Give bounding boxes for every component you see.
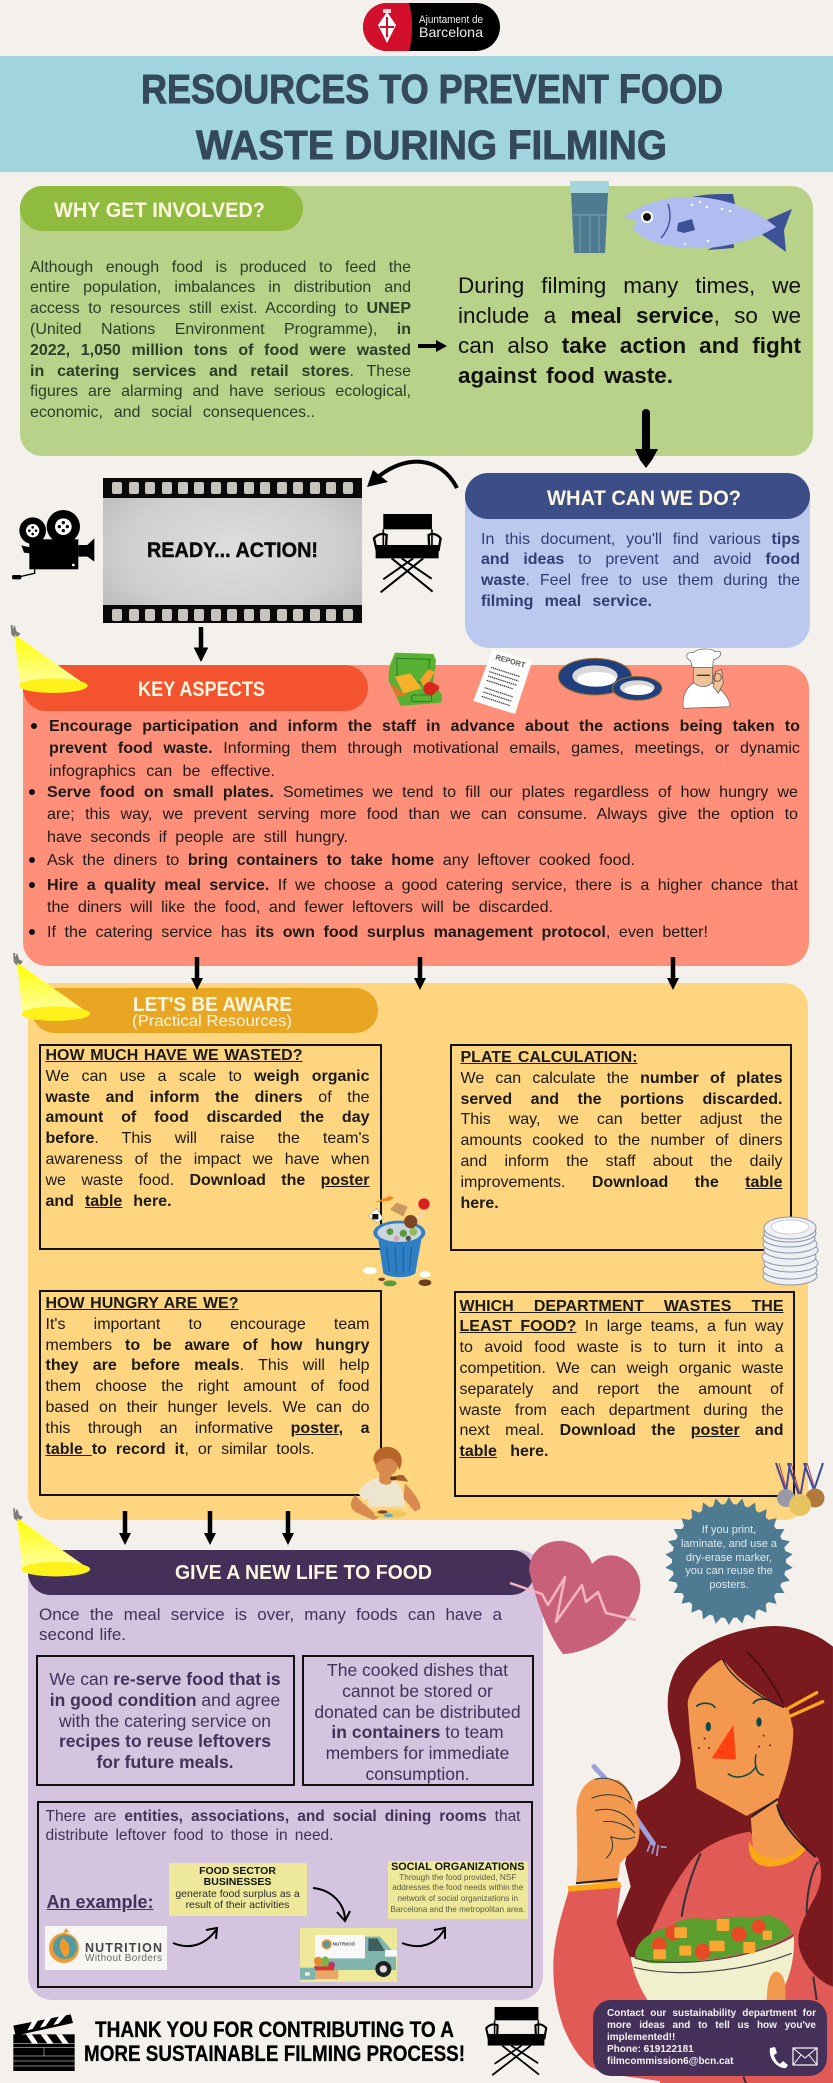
text: what can we do — [481, 531, 800, 610]
box: food sector businesses: generate food surplus as a — [175, 1888, 300, 1900]
logo: Ajuntament de Barcelona — [363, 3, 500, 51]
box: re-serve food: for future meals. — [96, 1752, 234, 1772]
panel: let's be aware — [28, 983, 808, 1520]
text: second life intro — [39, 1605, 502, 1644]
box: social organizations — [388, 1860, 528, 1918]
text: thank you: THANK YOU FOR CONTRIBUTING TO A — [95, 2017, 454, 2042]
box: how much have we wasted: and table here. — [46, 1193, 172, 1210]
film strip: ready action: READY... ACTION! — [147, 539, 318, 562]
text: contact details — [607, 2008, 816, 2067]
box: food sector businesses — [168, 1862, 306, 1916]
text: meal service call to action: against food waste. — [458, 363, 673, 388]
text: meal service call to action: can also take action and fight — [458, 333, 801, 358]
box: how much have we wasted: waste and inform the diners of the — [46, 1089, 370, 1106]
heading: let's be aware: LET'S BE AWARE — [133, 994, 292, 1016]
box: social organizations: network of social organizations in — [397, 1894, 518, 1903]
box: plate calculation: improvements. Download the table — [460, 1174, 782, 1191]
box: which department wastes the least food: competition. We can weigh organic waste — [460, 1360, 784, 1377]
text: food waste context: access to resources still exist. According to UNEP — [30, 300, 411, 317]
icon: clapperboard — [13, 2014, 75, 2071]
text: contact details: Phone: 619122181 — [607, 2044, 694, 2055]
illustration: nutrition delivery truck — [300, 1928, 396, 1982]
text: contact details: Contact our sustainability department for — [607, 2008, 816, 2019]
bullet: quality meal service: Hire a quality meal service. If we choose a good catering service, there is a higher chance that — [47, 876, 798, 894]
box: social organizations: addresses the food needs within the — [392, 1883, 523, 1892]
box: plate calculation — [450, 1044, 792, 1251]
icon: stack of plates — [762, 1217, 818, 1285]
box: social organizations: SOCIAL ORGANIZATIONS — [391, 1860, 524, 1872]
bullet: encourage participation: Encourage participation and inform the staff in advance about the actions being taken to — [49, 717, 800, 735]
label: an example: An example: — [46, 1892, 154, 1912]
icon: fish — [624, 194, 792, 252]
bullet: quality meal service: the diners will like the food, and fewer leftovers will be discarded. — [47, 898, 553, 916]
text: food waste context: economic, and social consequences.. — [30, 404, 315, 421]
text: second life intro: second life. — [39, 1625, 126, 1644]
box: food sector businesses: result of their activities — [186, 1899, 289, 1911]
heading: what can we do: WHAT CAN WE DO? — [547, 487, 741, 510]
box: food sector businesses: BUSINESSES — [204, 1876, 271, 1888]
box: cooked dishes: cannot be stored or — [342, 1681, 493, 1701]
text: thank you: MORE SUSTAINABLE FILMING PROCESS! — [84, 2041, 465, 2066]
box: cooked dishes: members for immediate — [326, 1743, 509, 1763]
logo: Ajuntament de Barcelona: Ajuntament de — [419, 14, 483, 26]
panel: key aspects — [23, 665, 809, 966]
icon: movie camera — [12, 510, 94, 579]
icon: spotlight let's be aware — [13, 953, 90, 1021]
heading: give a new life to food — [28, 1550, 534, 1595]
box: cooked dishes: The cooked dishes that — [327, 1660, 508, 1680]
box: how hungry are we: based on their hunger levels. We can do — [46, 1399, 370, 1416]
title band — [0, 56, 833, 172]
icon: report document — [473, 649, 532, 714]
box: how hungry are we: this through an informative poster, a — [46, 1420, 370, 1437]
title band: WASTE DURING FILMING — [196, 122, 667, 168]
icon: director chair footer — [486, 2007, 546, 2075]
text: entities: There are entities, associations, and social dining rooms that — [46, 1808, 520, 1825]
text: meal service call to action — [458, 273, 801, 388]
bullet: small plates: are; this way, we prevent serving more food than we can consume. Always give the option to — [47, 805, 798, 823]
text: contact details: more ideas and to tell us how you've — [607, 2020, 816, 2031]
heading: key aspects: KEY ASPECTS — [138, 678, 265, 701]
box: which department wastes the least food: separately and report the amount of — [460, 1381, 784, 1398]
logo: nutrition without borders: NUTRITION — [84, 1940, 162, 1954]
illustration: woman eating salad — [553, 1626, 833, 2083]
box: re-serve food: in good condition and agree — [50, 1690, 280, 1710]
box: social organizations: Through the food provided, NSF — [399, 1872, 516, 1882]
logo: nutrition without borders: Without Borders — [84, 1952, 162, 1964]
box: cooked dishes: in containers to team — [331, 1722, 504, 1742]
bullet: surplus protocol: If the catering service has its own food surplus management protocol, even better! — [47, 923, 708, 941]
arrow: logo to food sector — [173, 1928, 217, 1946]
box: plate calculation: amounts cooked to the number of diners — [460, 1132, 782, 1149]
arrows: key aspects to let's be aware — [191, 957, 679, 990]
bullet: small plates: Serve food on small plates. Sometimes we tend to fill our plates regardless of how hungry we — [47, 783, 798, 801]
arrow: truck to social organizations — [402, 1928, 445, 1946]
box: which department wastes the least food: table here. — [460, 1443, 548, 1460]
text: food waste context: (United Nations Environment Programme), in — [30, 321, 411, 338]
box: which department wastes the least food — [454, 1291, 795, 1497]
arrow: green panel down to what can we do — [635, 413, 658, 468]
box: how much have we wasted: HOW MUCH HAVE WE WASTED? — [46, 1047, 302, 1064]
badge: reuse the posters tip: laminate, and use a — [681, 1538, 777, 1550]
bullet: containers: Ask the diners to bring containers to take home any leftover cooked food. — [47, 851, 635, 869]
badge: reuse the posters tip: dry-erase marker, — [686, 1552, 772, 1564]
heading: let's be aware — [32, 988, 378, 1033]
box: food sector businesses: FOOD SECTOR — [199, 1865, 276, 1877]
heading: why get involved: WHY GET INVOLVED? — [54, 199, 265, 222]
icon: director chair — [374, 514, 441, 592]
box: cooked dishes: donated can be distributed — [314, 1702, 521, 1722]
illustration: nutrition delivery truck: NUTRICIÓ — [332, 1939, 355, 1946]
box: re-serve food: with the catering service on — [59, 1711, 271, 1731]
icon: chef — [683, 649, 730, 708]
heading: key aspects — [23, 665, 368, 711]
text: what can we do: In this document, you'll find various tips — [481, 531, 800, 548]
arrow: what can we do to film strip — [367, 462, 457, 488]
icon: spotlight give a new life — [13, 1508, 90, 1576]
icon: heart with pulse — [510, 1541, 640, 1654]
text: what can we do: and ideas to prevent and avoid food — [481, 551, 800, 568]
bullet: encourage participation: infographics can be effective. — [49, 762, 275, 780]
box: how hungry are we: them choose the right amount of food — [46, 1378, 370, 1395]
box: re-serve food: We can re-serve food that is — [49, 1669, 281, 1689]
box: how hungry are we — [39, 1290, 382, 1496]
box: which department wastes the least food: next meal. Download the poster and — [460, 1422, 784, 1439]
text: food waste context: Although enough food is produced to feed the — [30, 259, 411, 276]
badge: reuse the posters tip: If you print, — [702, 1524, 756, 1536]
box: how much have we wasted: We can use a scale to weigh organic — [46, 1068, 370, 1085]
heading: what can we do — [465, 473, 810, 519]
text: food waste context — [30, 259, 411, 421]
bullet: encourage participation: prevent food waste. Informing them through motivational emails, games, meetings, or dynamic — [49, 739, 800, 757]
text: contact details: implemented!! — [607, 2032, 675, 2043]
box: how much have we wasted: before. This will raise the team's — [46, 1130, 370, 1147]
box: which department wastes the least food: WHICH DEPARTMENT WASTES THE — [460, 1298, 784, 1315]
panel: what can we do — [465, 473, 810, 648]
box: cooked dishes: consumption. — [365, 1764, 470, 1784]
panel: contact — [593, 2000, 827, 2076]
arrow: why to meal text — [418, 340, 447, 352]
icon: glass of water — [570, 181, 609, 253]
box: how hungry are we: members to be aware of how hungry — [46, 1337, 370, 1354]
box: how hungry are we: table to record it, or similar tools. — [46, 1441, 315, 1458]
icon: spotlight key aspects — [11, 625, 88, 693]
box: how hungry are we: It's important to encourage team — [46, 1316, 370, 1333]
badge: reuse the posters tip: posters. — [709, 1579, 749, 1591]
icon: lunch box — [388, 653, 442, 706]
icons: phone and mail — [770, 2047, 818, 2068]
text: second life intro: Once the meal service is over, many foods can have a — [39, 1605, 502, 1624]
title band: RESOURCES TO PREVENT FOOD — [141, 66, 723, 112]
box: how hungry are we: they are before meals. This will help — [46, 1357, 370, 1374]
text: contact details: filmcommission6@bcn.cat — [607, 2056, 733, 2067]
box: plate calculation: We can calculate the number of plates — [460, 1070, 782, 1087]
icon: eating person — [351, 1447, 421, 1520]
heading: give a new life to food: GIVE A NEW LIFE TO FOOD — [175, 1562, 432, 1584]
panel: give a new life to food — [28, 1550, 543, 2000]
badge: reuse the posters tip: you can reuse the — [685, 1565, 773, 1577]
box: which department wastes the least food: waste from each department during the — [460, 1402, 784, 1419]
panel: why get involved — [20, 186, 813, 456]
icon: plates — [558, 658, 662, 700]
text: what can we do: filming meal service. — [481, 593, 652, 610]
badge: reuse the posters tip — [666, 1497, 793, 1625]
box: plate calculation: This way, we can better adjust the — [460, 1111, 782, 1128]
text: food waste context: in catering services and retail stores. These — [30, 363, 411, 380]
text: entities: distribute leftover food to those in need. — [46, 1827, 334, 1844]
box: re-serve food: recipes to reuse leftovers — [59, 1731, 271, 1751]
box: how much have we wasted: we waste food. Download the poster — [46, 1172, 370, 1189]
text: food waste context: 2022, 1,050 million tons of food were wasted — [30, 342, 411, 359]
arrow: food sector to truck — [313, 1888, 350, 1921]
logo: Ajuntament de Barcelona: Barcelona — [419, 24, 483, 40]
film strip: ready action — [103, 478, 362, 623]
text: meal service call to action: During filming many times, we — [458, 273, 801, 298]
box: plate calculation: PLATE CALCULATION: — [460, 1049, 638, 1066]
box: plate calculation: served and the portions discarded. — [460, 1091, 782, 1108]
box: plate calculation: here. — [460, 1195, 499, 1212]
icon: trash bin with food — [363, 1196, 431, 1286]
box: how hungry are we: HOW HUNGRY ARE WE? — [46, 1295, 238, 1312]
box: entities and example chain — [37, 1801, 533, 1988]
text: food waste context: entire population, imbalances in distribution and — [30, 279, 411, 296]
text: meal service call to action: include a meal service, so we — [458, 303, 801, 328]
box: how much have we wasted — [39, 1044, 382, 1250]
arrows: let's be aware to give a new life — [119, 1511, 294, 1545]
bullet: small plates — [29, 783, 798, 846]
bullet: encourage participation — [31, 717, 800, 780]
arrow: film strip to key aspects — [194, 627, 208, 661]
text: food waste context: figures are alarming and have serious ecological, — [30, 383, 411, 400]
box: which department wastes the least food: LEAST FOOD? In large teams, a fun way — [460, 1318, 784, 1335]
heading: let's be aware: (Practical Resources) — [132, 1013, 292, 1030]
heading: why get involved — [20, 186, 303, 231]
icon: report document: REPORT — [494, 653, 527, 670]
box: how much have we wasted: awareness of the impact we have when — [46, 1151, 370, 1168]
box: re-serve food — [36, 1655, 295, 1786]
logo: nutrition without borders — [44, 1926, 166, 1970]
bullet: quality meal service — [29, 876, 798, 916]
text: thank you — [84, 2017, 465, 2066]
icon: medals — [776, 1463, 824, 1516]
text: entities — [46, 1808, 520, 1844]
box: which department wastes the least food: to avoid food waste is to turn it into a — [460, 1339, 784, 1356]
bullet: small plates: have seconds if people are still hungry. — [47, 828, 348, 846]
box: how much have we wasted: amount of food discarded the day — [46, 1109, 370, 1126]
text: what can we do: waste. Feel free to use them during the — [481, 572, 800, 589]
box: social organizations: Barcelona and the metropolitan area. — [390, 1905, 525, 1914]
box: cooked dishes — [302, 1655, 534, 1786]
box: plate calculation: and inform the staff about the daily — [460, 1153, 782, 1170]
